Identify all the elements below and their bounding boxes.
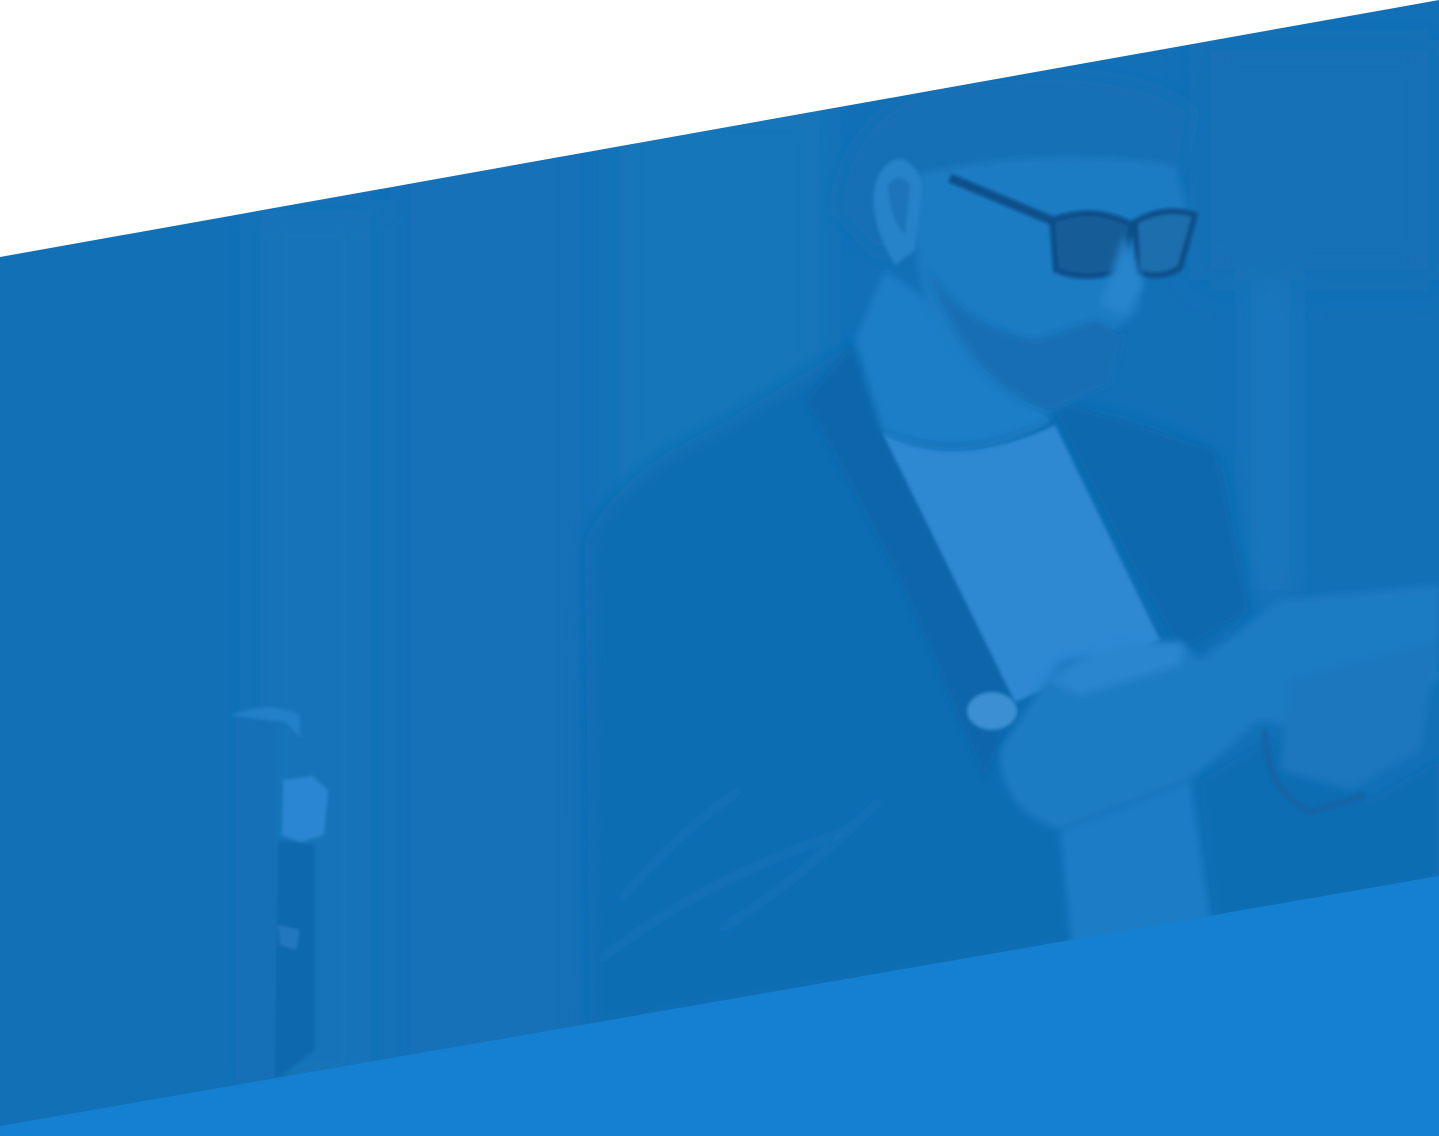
watch strap: [1265, 730, 1365, 812]
lower shirt: [1060, 780, 1210, 948]
glasses: [950, 178, 1195, 276]
beard: [936, 286, 1119, 410]
hands and tablet: [1000, 585, 1439, 830]
bottom solid band: [0, 876, 1439, 1136]
t-shirt: [882, 425, 1160, 702]
jacket: [585, 345, 1250, 1030]
jacket sleeve highlights: [833, 833, 844, 840]
nose: [1104, 236, 1144, 311]
ear: [874, 159, 922, 265]
background figure left: [232, 708, 328, 1092]
jacket button: [967, 692, 1017, 730]
neck: [855, 270, 1050, 445]
hair: [842, 64, 1186, 215]
shirt collar: [887, 428, 1033, 451]
face: [918, 158, 1186, 338]
background pillars: [234, 22, 1312, 216]
